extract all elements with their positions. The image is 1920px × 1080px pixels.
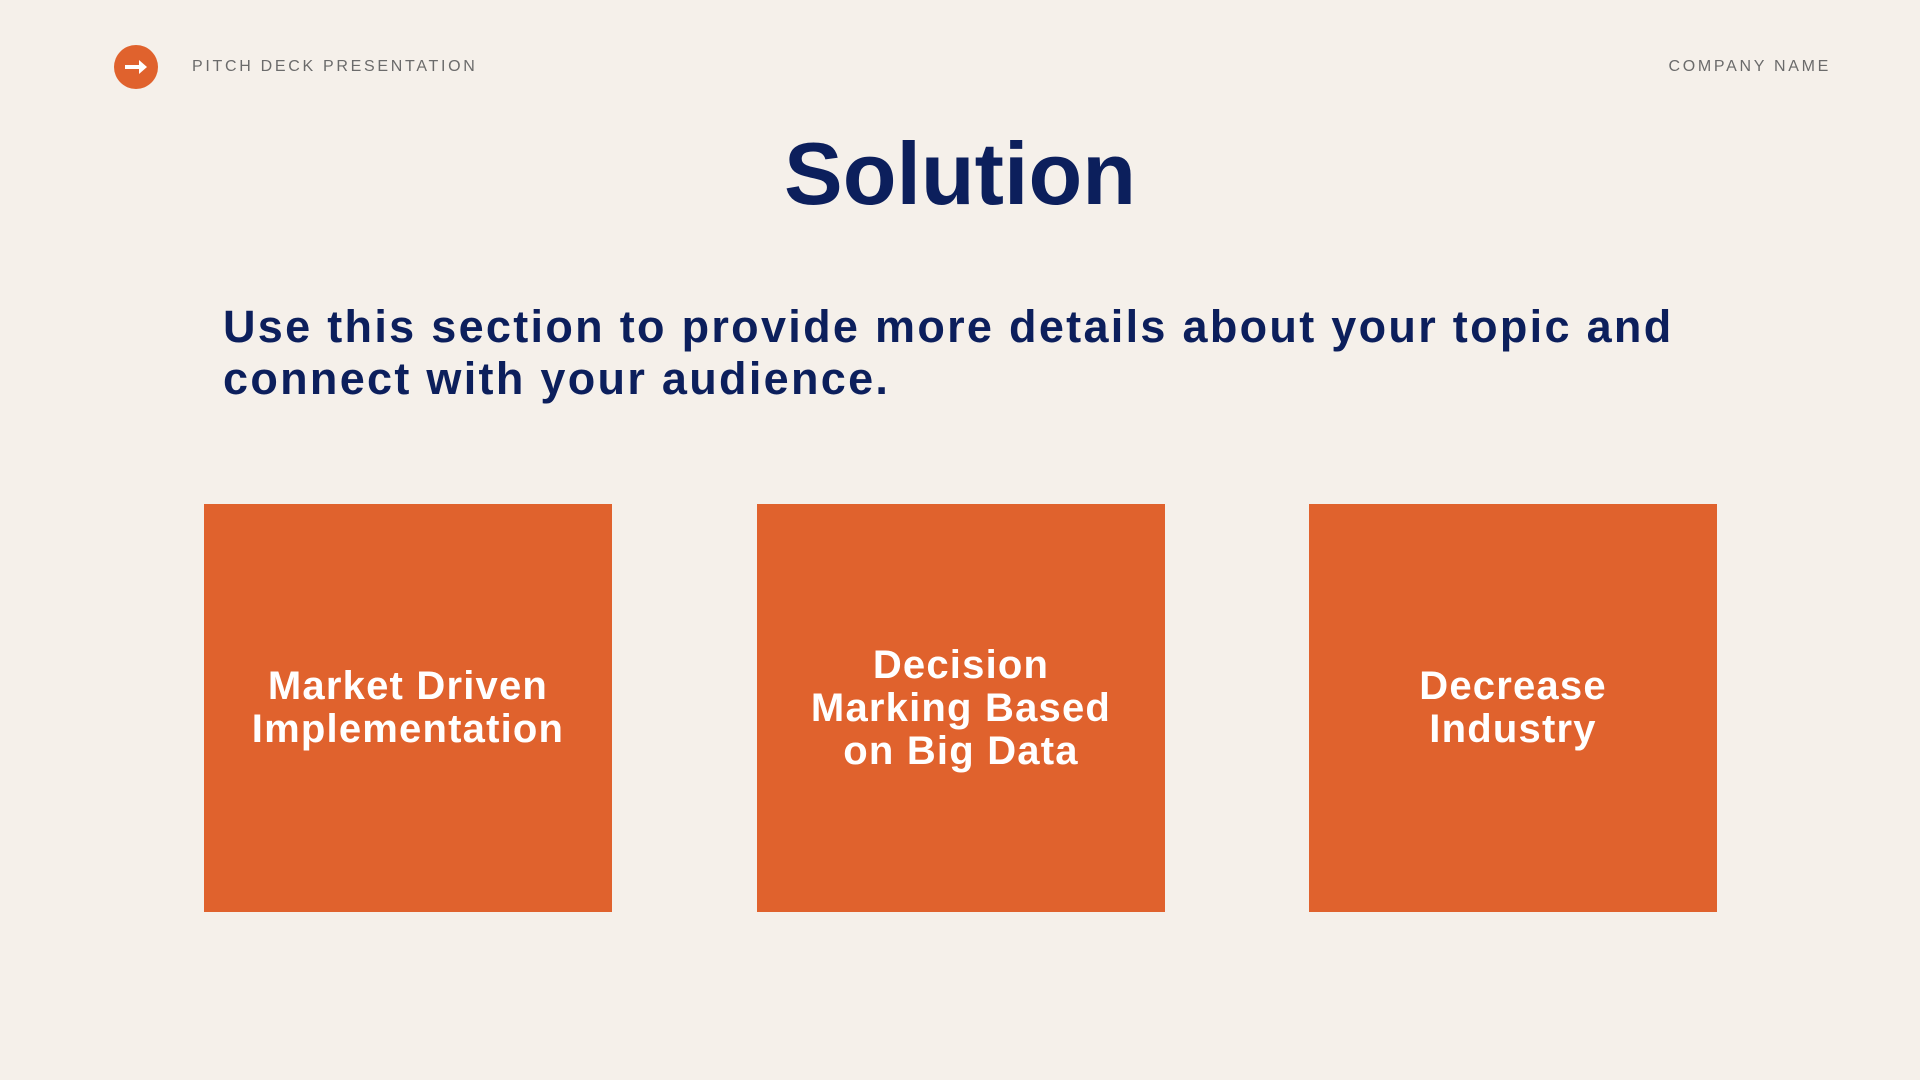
panel: Decision Marking Based on Big Data: Decision	[873, 642, 1049, 686]
panel: Decision Marking Based on Big Data	[757, 504, 1165, 912]
text block: description: Use this section to provide more details about your topic and	[223, 301, 1674, 352]
text block: description	[223, 301, 1674, 404]
header left text: PITCH DECK PRESENTATION	[192, 58, 478, 75]
icon: arrow circle	[114, 45, 158, 89]
panel: Decrease Industry: Industry	[1429, 707, 1597, 751]
panel: Market Driven Implementation	[204, 504, 612, 912]
panel: Decrease Industry	[1309, 504, 1717, 912]
text block: description: connect with your audience.	[223, 353, 890, 404]
panel: Market Driven Implementation: Market Driven	[268, 664, 548, 708]
header right text: COMPANY NAME	[1668, 58, 1831, 75]
panel: Decision Marking Based on Big Data: Marking Based	[811, 686, 1111, 730]
panel: Decision Marking Based on Big Data: on Big Data	[843, 728, 1079, 772]
panel: Market Driven Implementation: Implementation	[252, 707, 564, 751]
title: Solution	[784, 124, 1136, 223]
panel: Decrease Industry: Decrease	[1419, 664, 1607, 708]
